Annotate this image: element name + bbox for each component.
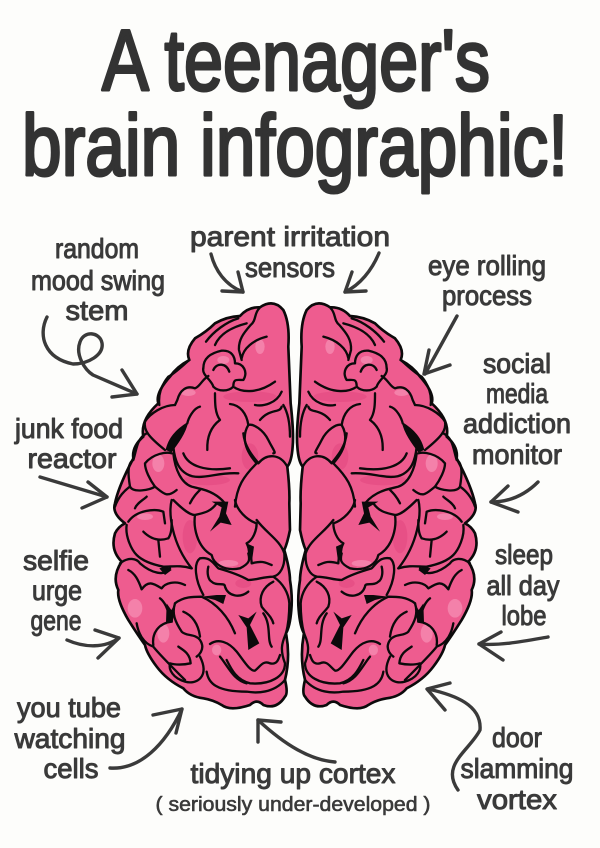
title: A teenager's — [102, 13, 490, 109]
arrow: sensors left — [211, 254, 243, 292]
label: tidying up cortex — [156, 758, 430, 816]
label: selfie urge gene: gene — [30, 605, 82, 636]
arrow: door — [427, 683, 480, 790]
label: selfie urge gene — [23, 545, 89, 636]
arrow: eye rolling — [424, 316, 457, 374]
left hemisphere — [113, 303, 293, 708]
right hemisphere — [297, 303, 477, 708]
label: random mood swing stem: mood swing — [31, 265, 165, 296]
label: random mood swing stem — [31, 233, 165, 326]
label: sleep all day lobe: lobe — [502, 600, 546, 631]
label: social media addiction monitor: social — [483, 348, 551, 379]
arrow: junk food — [40, 477, 107, 508]
arrow: sensors right — [345, 253, 379, 292]
label: door slamming vortex: slamming — [460, 753, 574, 784]
label: you tube watching cells: cells — [44, 753, 98, 784]
label: sleep all day lobe: sleep — [495, 539, 553, 570]
arrow: social media — [491, 482, 538, 512]
label: social media addiction monitor: media — [486, 378, 548, 409]
label: sleep all day lobe: all day — [486, 570, 560, 601]
label: selfie urge gene: urge — [32, 575, 82, 606]
label: social media addiction monitor: monitor — [472, 439, 562, 470]
label: you tube watching cells: watching — [13, 723, 125, 754]
label: you tube watching cells — [13, 692, 125, 784]
label: junk food reactor — [14, 413, 123, 474]
arrow: sleep — [479, 632, 548, 660]
label: parent irritation sensors: parent irritation — [190, 221, 390, 252]
arrow: mood swing — [43, 317, 137, 397]
label: eye rolling process: process — [442, 280, 532, 311]
label: you tube watching cells: you tube — [17, 692, 121, 723]
label: junk food reactor: junk food — [14, 413, 123, 444]
label: parent irritation sensors: sensors — [245, 252, 335, 283]
label: tidying up cortex: ( seriously under-developed ) — [156, 794, 430, 816]
label: random mood swing stem: stem — [66, 295, 128, 326]
arrow: tidying — [258, 720, 335, 762]
label: social media addiction monitor — [463, 348, 571, 470]
label: tidying up cortex: tidying up cortex — [190, 758, 396, 789]
label: door slamming vortex: door — [492, 722, 542, 753]
label: junk food reactor: reactor — [28, 443, 116, 474]
arrow: selfie — [67, 630, 119, 658]
label: parent irritation sensors — [190, 221, 390, 283]
label: eye rolling process: eye rolling — [428, 250, 546, 281]
label: sleep all day lobe — [486, 539, 560, 631]
label: eye rolling process — [428, 250, 546, 311]
arrow: you tube — [110, 709, 182, 768]
label: random mood swing stem: random — [55, 233, 139, 264]
brain — [113, 303, 477, 708]
label: door slamming vortex: vortex — [477, 784, 557, 815]
title — [22, 13, 568, 194]
label: selfie urge gene: selfie — [23, 545, 89, 576]
label: door slamming vortex — [460, 722, 574, 815]
label: social media addiction monitor: addiction — [463, 408, 571, 439]
